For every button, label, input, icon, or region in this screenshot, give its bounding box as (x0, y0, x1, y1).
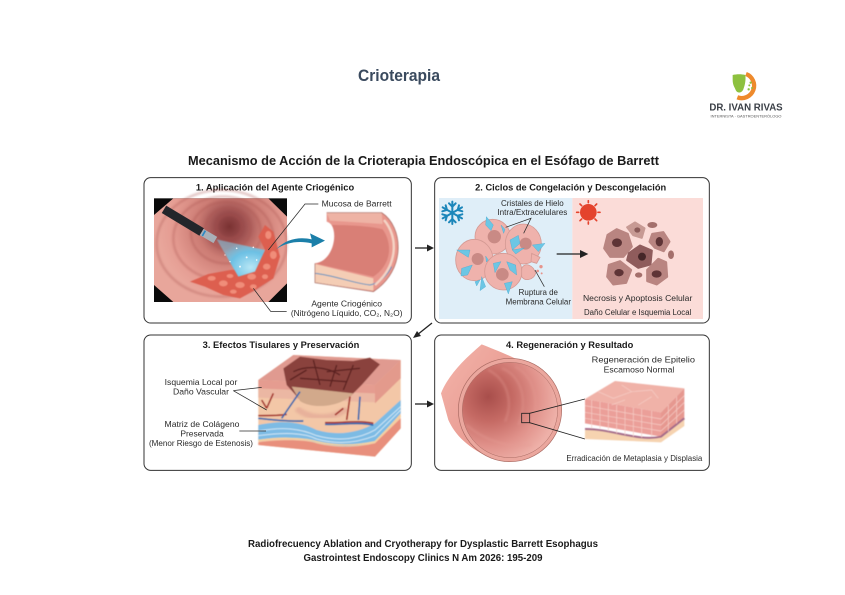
label: preserved collagen matrix: (Menor Riesgo de Estenosis) (149, 438, 253, 448)
footer citation: Gastrointest Endoscopy Clinics N Am 2026: 195-209 (304, 553, 543, 564)
icon: sun (577, 201, 600, 224)
label: cryogenic agent (253, 288, 403, 318)
label: squamous epithelium regeneration: Escamoso Normal (604, 365, 674, 375)
tissue block (258, 355, 401, 457)
label: eradication of metaplasia and dysplasia: Erradicación de Metaplasia y Displasia (566, 453, 703, 463)
esophagus cross-section (315, 213, 398, 292)
freeze background (439, 198, 572, 319)
arrow: zoom to section (276, 233, 325, 249)
panel 1: application of cryogenic agent (144, 178, 411, 323)
zoom box and connectors (522, 399, 585, 439)
main heading: Mecanismo de Acción de la Crioterapia Endoscópica en el Esófago de Barrett (188, 153, 660, 168)
footer citation: Radiofrecuency Ablation and Cryotherapy for Dysplastic Barrett Esophagus (248, 539, 598, 550)
label: membrane rupture: Ruptura de (519, 287, 558, 297)
label: ice crystals: Intra/Extracelulares (497, 207, 567, 217)
label: squamous epithelium regeneration: Regeneración de Epitelio (592, 355, 695, 365)
ischemic crater (283, 357, 380, 405)
muscle layer (258, 418, 401, 457)
label: cell damage and ischemia: Daño Celular e Isquemia Local (584, 308, 692, 317)
label: local ischemia: Isquemia Local por (165, 377, 238, 387)
panel 3 heading: 3. Efectos Tisulares y Preservación (203, 340, 360, 350)
label: Mucosa de Barrett (268, 199, 392, 250)
icon: snowflake (442, 202, 462, 224)
label: local ischemia: Daño Vascular (173, 387, 229, 397)
title: Crioterapia (358, 67, 441, 85)
panel 3: tissue effects (144, 335, 411, 470)
label: cryogenic agent: Agente Criogénico (311, 298, 382, 308)
thaw background (572, 198, 703, 319)
icon: logo ring and leaf (733, 74, 754, 98)
logo subtitle: INTERNISTA · GASTROENTERÓLOGO (710, 114, 781, 119)
ice crystals (457, 217, 545, 294)
endoscopic view (154, 190, 287, 302)
arrow: panel 3 to 4 (415, 400, 434, 408)
panel 2: freeze-thaw cycles (435, 178, 709, 323)
collagen layer (258, 400, 401, 446)
logo: Dr. Ivan Rivas (709, 74, 783, 119)
arrow: freeze to necrosis (557, 250, 588, 258)
label: membrane rupture: Membrana Celular (506, 296, 571, 306)
panel 2 heading: 2. Ciclos de Congelación y Descongelación (475, 183, 666, 193)
label: cryogenic agent: (Nitrógeno Líquido, CO₂, N₂O) (291, 308, 403, 318)
frozen cells (456, 219, 543, 290)
Barrett mucosa patches (190, 225, 280, 298)
blood vessels (258, 392, 373, 425)
label: membrane rupture (506, 270, 571, 306)
esophagus lumen (441, 344, 562, 462)
panel 1 heading: 1. Aplicación del Agente Criogénico (196, 183, 354, 193)
label: preserved collagen matrix (149, 419, 266, 448)
label: ice crystals: Cristales de Hielo (501, 198, 564, 208)
arrow: panel 1 to 2 (415, 244, 434, 252)
footer citation (248, 539, 598, 564)
necrotic cells (604, 222, 674, 284)
endoscope (164, 209, 215, 240)
arrow: panel 2 to 3 (413, 323, 432, 338)
label: local ischemia (165, 377, 267, 410)
label: preserved collagen matrix: Preservada (180, 429, 224, 439)
label: ice crystals (497, 198, 567, 233)
label: squamous epithelium regeneration (592, 355, 695, 375)
label: preserved collagen matrix: Matriz de Colágeno (164, 419, 240, 429)
panel 4 heading: 4. Regeneración y Resultado (506, 340, 634, 350)
logo name: DR. IVAN RIVAS (709, 102, 783, 113)
panel 4: regeneration and outcome (435, 335, 709, 470)
cryogenic spray (217, 239, 265, 277)
label: Mucosa de Barrett: Mucosa de Barrett (322, 199, 392, 209)
label: necrosis and apoptosis: Necrosis y Apoptosis Celular (583, 293, 693, 303)
epithelium block (585, 381, 684, 442)
